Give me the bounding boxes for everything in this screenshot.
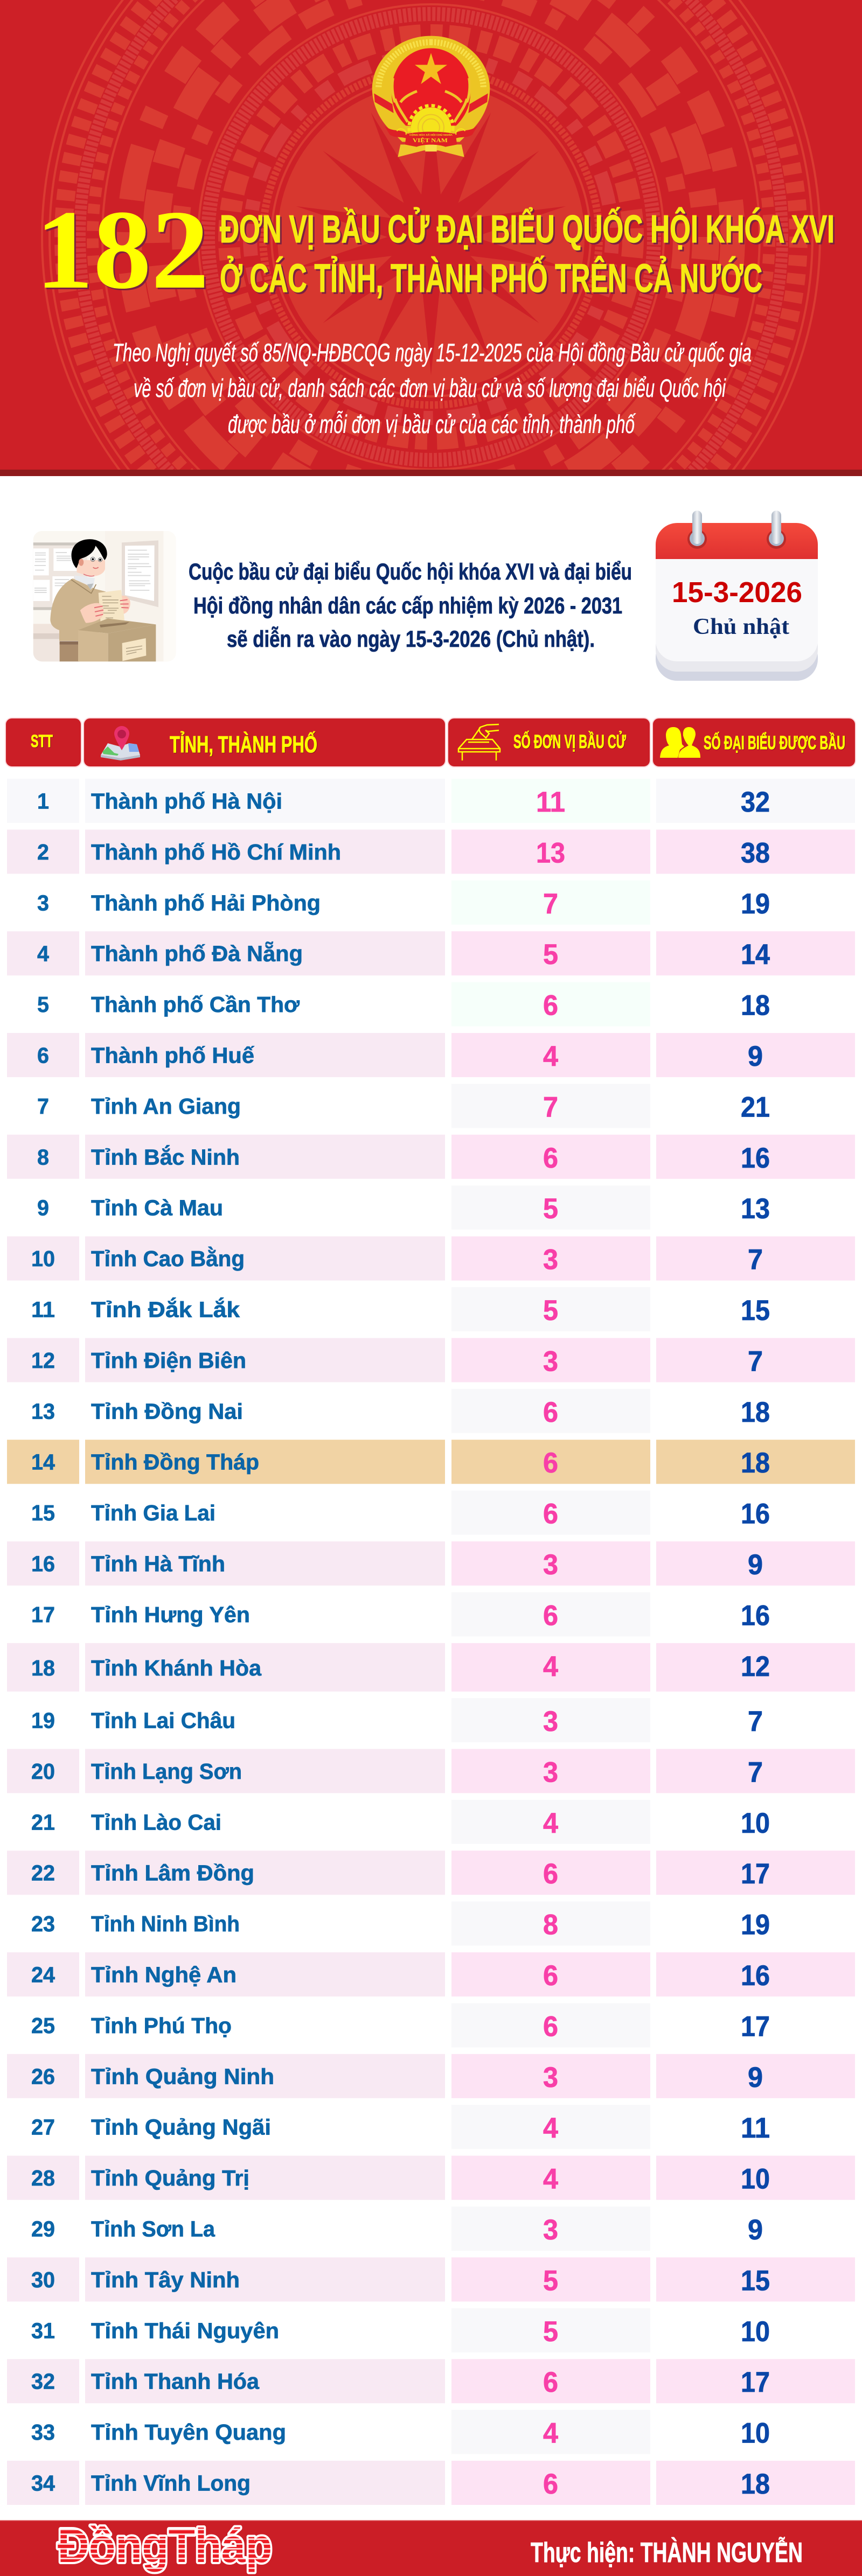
row 19: Tỉnh Lai Châu: [91, 1708, 235, 1733]
row 19: 19: [31, 1708, 55, 1733]
text block: election date announcement: [189, 559, 632, 652]
text block: election date announcement: Cuộc bầu cử đại biểu Quốc hội khóa XVI và đại biểu: [189, 559, 632, 585]
row 33: 33: [31, 2420, 55, 2445]
row 5: 5: [37, 992, 49, 1017]
row 10: [7, 1237, 855, 1281]
header cell: electoral units: SỐ ĐƠN VỊ BẦU CỬ: [513, 731, 627, 752]
row 26: Tỉnh Quảng Ninh: [91, 2064, 274, 2089]
row 31: 5: [543, 2316, 558, 2348]
row 32: 6: [543, 2366, 558, 2398]
row 3: 7: [543, 888, 558, 920]
banner background: [0, 0, 862, 476]
row 8: 16: [741, 1142, 770, 1174]
row 1: 11: [536, 786, 565, 818]
row 24: 24: [31, 1963, 55, 1987]
row 11: 11: [31, 1297, 55, 1322]
footer bar: [0, 2519, 862, 2576]
row 26: 9: [748, 2062, 763, 2093]
row 9: 13: [741, 1193, 770, 1225]
row 24: Tỉnh Nghệ An: [91, 1963, 237, 1987]
row 14: highlighted Đồng Tháp: 6: [543, 1447, 558, 1479]
row 12: [7, 1338, 855, 1382]
row 16: 3: [543, 1549, 558, 1581]
row 2: 38: [741, 837, 770, 869]
title: big number 182: 182: [36, 187, 209, 312]
header cell: STT: [5, 718, 81, 767]
row 9: 9: [37, 1196, 49, 1220]
row 27: 4: [543, 2112, 558, 2144]
row 9: Tỉnh Cà Mau: [91, 1196, 223, 1220]
row 15: [7, 1491, 855, 1535]
row 20: 7: [748, 1756, 763, 1788]
row 2: 2: [37, 840, 49, 864]
row 13: [7, 1389, 855, 1433]
row 25: [7, 2003, 855, 2047]
row 34: 34: [31, 2471, 55, 2496]
row 9: [7, 1185, 855, 1230]
row 13: 13: [31, 1399, 55, 1423]
row 9: 5: [543, 1193, 558, 1225]
icon: national emblem: VIỆT NAM: [413, 137, 448, 144]
row 2: 13: [536, 837, 565, 869]
row 14: highlighted Đồng Tháp: Tỉnh Đồng Tháp: [91, 1450, 259, 1475]
row 10: 7: [748, 1244, 763, 1276]
row 23: Tỉnh Ninh Bình: [91, 1911, 240, 1936]
row 10: 3: [543, 1244, 558, 1276]
row 30: Tỉnh Tây Ninh: [91, 2267, 240, 2292]
row 33: 10: [741, 2418, 770, 2449]
row 27: 27: [31, 2115, 55, 2140]
row 25: 17: [741, 2010, 770, 2042]
row 21: [7, 1800, 855, 1844]
row 18: 18: [31, 1656, 55, 1680]
row 11: [7, 1287, 855, 1331]
icon: voter casting ballot illustration: [33, 531, 176, 661]
row 29: 9: [748, 2214, 763, 2246]
row 31: 31: [31, 2318, 55, 2343]
row 29: 29: [31, 2217, 55, 2242]
text block: resolution summary: được bầu ở mỗi đơn vị bầu cử của các tỉnh, thành phố: [228, 410, 636, 438]
row 8: [7, 1135, 855, 1179]
row 6: 9: [748, 1041, 763, 1072]
row 6: Thành phố Huế: [91, 1043, 254, 1067]
row 24: [7, 1952, 855, 1996]
header cell: delegates: [652, 718, 856, 767]
row 34: [7, 2461, 855, 2505]
text block: resolution summary: [113, 338, 752, 438]
row 28: [7, 2156, 855, 2200]
row 14: highlighted Đồng Tháp: 14: [31, 1450, 55, 1475]
row 5: 18: [741, 990, 770, 1022]
row 10: Tỉnh Cao Bằng: [91, 1246, 245, 1271]
row 33: Tỉnh Tuyên Quang: [91, 2420, 286, 2445]
row 18: Tỉnh Khánh Hòa: [91, 1656, 262, 1680]
row 25: 6: [543, 2010, 558, 2042]
row 17: 17: [31, 1602, 55, 1627]
row 8: Tỉnh Bắc Ninh: [91, 1144, 240, 1169]
icon: map with pin: [101, 726, 140, 760]
row 16: [7, 1541, 855, 1586]
weekday: Chủ nhật: [693, 615, 789, 639]
row 13: Tỉnh Đồng Nai: [91, 1399, 243, 1423]
row 17: [7, 1592, 855, 1636]
row 16: 9: [748, 1549, 763, 1581]
icon: calendar with election date: [656, 511, 818, 681]
row 27: Tỉnh Quảng Ngãi: [91, 2115, 271, 2140]
row 7: 7: [37, 1094, 49, 1119]
logo: Đồng Tháp newspaper: ĐồngTháp: [58, 2519, 272, 2572]
row 11: 5: [543, 1295, 558, 1327]
row 34: Tỉnh Vĩnh Long: [91, 2471, 251, 2496]
row 5: [7, 982, 855, 1027]
row 32: [7, 2359, 855, 2403]
row 17: 6: [543, 1600, 558, 1631]
row 28: 4: [543, 2163, 558, 2195]
row 21: 21: [31, 1810, 55, 1834]
row 15: 15: [31, 1500, 55, 1525]
row 30: 30: [31, 2267, 55, 2292]
row 31: 10: [741, 2316, 770, 2348]
row 27: [7, 2105, 855, 2149]
icon: two people silhouettes: [660, 727, 700, 758]
row 21: Tỉnh Lào Cai: [91, 1810, 221, 1834]
row 22: 22: [31, 1861, 55, 1886]
row 4: Thành phố Đà Nẵng: [91, 941, 303, 966]
row 18: 12: [741, 1651, 770, 1683]
row 12: 12: [31, 1348, 55, 1373]
bronze drum pattern: [41, 0, 821, 470]
row 22: [7, 1851, 855, 1895]
row 30: 15: [741, 2265, 770, 2296]
row 4: 14: [741, 939, 770, 971]
row 4: 5: [543, 939, 558, 971]
row 2: Thành phố Hồ Chí Minh: [91, 840, 341, 864]
header cell: STT: STT: [31, 731, 53, 751]
row 29: 3: [543, 2214, 558, 2246]
row 3: 19: [741, 888, 770, 920]
row 14: highlighted Đồng Tháp: [7, 1440, 855, 1484]
row 32: 17: [741, 2366, 770, 2398]
row 11: Tỉnh Đắk Lắk: [91, 1297, 240, 1322]
icon: national emblem: [372, 36, 490, 157]
row 24: 16: [741, 1960, 770, 1992]
row 28: Tỉnh Quảng Trị: [91, 2166, 249, 2190]
row 11: 15: [741, 1295, 770, 1327]
row 21: 10: [741, 1807, 770, 1839]
row 25: Tỉnh Phú Thọ: [91, 2013, 232, 2038]
row 23: 23: [31, 1911, 55, 1936]
row 23: 8: [543, 1909, 558, 1941]
row 4: 4: [37, 941, 49, 966]
row 12: 3: [543, 1345, 558, 1377]
row 16: Tỉnh Hà Tĩnh: [91, 1551, 225, 1576]
row 1: [7, 779, 855, 823]
row 14: highlighted Đồng Tháp: 18: [741, 1447, 770, 1479]
row 7: Tỉnh An Giang: [91, 1094, 241, 1119]
header cell: province and city: [84, 718, 446, 767]
row 17: Tỉnh Hưng Yên: [91, 1602, 250, 1627]
row 19: 7: [748, 1706, 763, 1737]
row 1: Thành phố Hà Nội: [91, 788, 282, 813]
row 5: Thành phố Cần Thơ: [91, 992, 300, 1017]
row 10: 10: [31, 1246, 55, 1271]
row 12: 7: [748, 1345, 763, 1377]
row 26: [7, 2054, 855, 2098]
row 6: 4: [543, 1041, 558, 1072]
row 8: 6: [543, 1142, 558, 1174]
table header: [5, 718, 856, 767]
row 13: 18: [741, 1397, 770, 1428]
row 3: [7, 881, 855, 925]
text block: election date announcement: Hội đồng nhân dân các cấp nhiệm kỳ 2026 - 2031: [193, 593, 622, 619]
row 3: Thành phố Hải Phòng: [91, 890, 321, 915]
row 7: 21: [741, 1091, 770, 1123]
row 5: 6: [543, 990, 558, 1022]
row 24: 6: [543, 1960, 558, 1992]
row 28: 28: [31, 2166, 55, 2190]
row 15: 16: [741, 1498, 770, 1530]
row 6: [7, 1033, 855, 1077]
row 23: 19: [741, 1909, 770, 1941]
row 30: 5: [543, 2265, 558, 2296]
row 22: 17: [741, 1858, 770, 1890]
header cell: electoral units: [448, 718, 650, 767]
row 18: 4: [543, 1651, 558, 1683]
row 7: 7: [543, 1091, 558, 1123]
row 19: 3: [543, 1706, 558, 1737]
row 34: 18: [741, 2468, 770, 2500]
row 32: Tỉnh Thanh Hóa: [91, 2369, 260, 2394]
row 3: 3: [37, 890, 49, 915]
row 31: Tỉnh Thái Nguyên: [91, 2318, 279, 2343]
row 2: [7, 829, 855, 874]
row 4: [7, 931, 855, 975]
row 26: 3: [543, 2062, 558, 2093]
row 12: Tỉnh Điện Biên: [91, 1348, 246, 1373]
icon: hand and ballot box: [458, 724, 500, 760]
row 27: 11: [741, 2112, 770, 2144]
row 22: Tỉnh Lâm Đồng: [91, 1861, 254, 1886]
row 29: [7, 2207, 855, 2251]
date: 15-3-2026: [672, 576, 802, 609]
row 34: 6: [543, 2468, 558, 2500]
row 15: 6: [543, 1498, 558, 1530]
row 25: 25: [31, 2013, 55, 2038]
row 1: 32: [741, 786, 770, 818]
row 15: Tỉnh Gia Lai: [91, 1500, 215, 1525]
text block: election date announcement: sẽ diễn ra vào ngày 15-3-2026 (Chủ nhật).: [227, 626, 595, 652]
row 26: 26: [31, 2064, 55, 2089]
row 7: [7, 1084, 855, 1128]
table: electoral units by province: [7, 779, 855, 2505]
row 18: [7, 1643, 855, 1692]
row 33: 4: [543, 2418, 558, 2449]
row 17: 16: [741, 1600, 770, 1631]
row 28: 10: [741, 2163, 770, 2195]
row 22: 6: [543, 1858, 558, 1890]
row 20: 20: [31, 1759, 55, 1784]
row 1: 1: [37, 788, 49, 813]
icon: national emblem: CỘNG HÒA XÃ HỘI CHỦ NGHĨA: [409, 132, 453, 137]
header cell: province and city: TỈNH, THÀNH PHỐ: [170, 730, 317, 758]
row 20: 3: [543, 1756, 558, 1788]
row 31: [7, 2308, 855, 2352]
row 23: [7, 1902, 855, 1946]
row 32: 32: [31, 2369, 55, 2394]
row 13: 6: [543, 1397, 558, 1428]
row 30: [7, 2257, 855, 2301]
row 19: [7, 1698, 855, 1742]
row 20: [7, 1749, 855, 1793]
row 8: 8: [37, 1144, 49, 1169]
row 21: 4: [543, 1807, 558, 1839]
row 33: [7, 2410, 855, 2454]
row 29: Tỉnh Sơn La: [91, 2217, 215, 2242]
row 6: 6: [37, 1043, 49, 1067]
row 20: Tỉnh Lạng Sơn: [91, 1759, 242, 1784]
row 16: 16: [31, 1551, 55, 1576]
